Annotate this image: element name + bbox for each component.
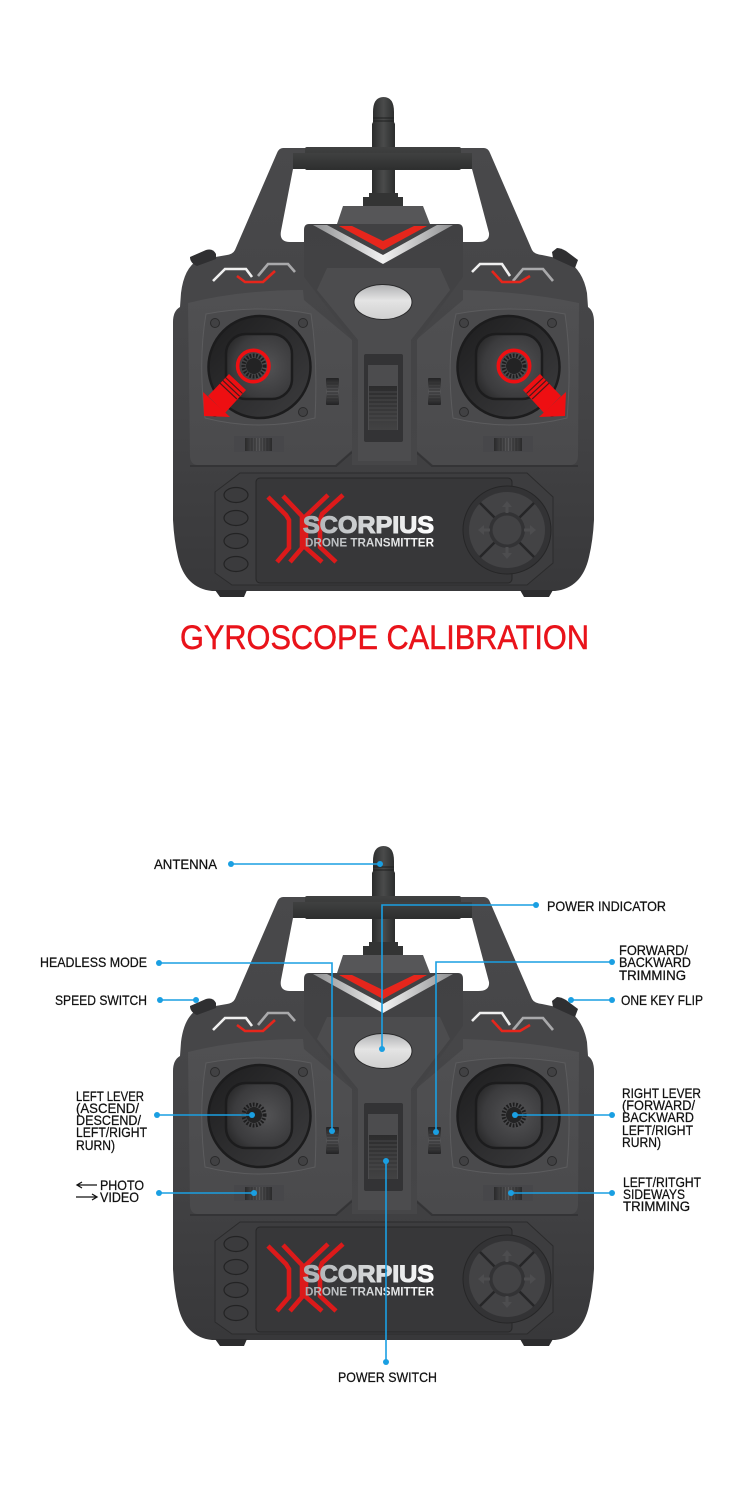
logo text: DRONE TRANSMITTER — [305, 536, 434, 550]
logo text: SCORPIUS — [303, 1261, 434, 1288]
handle bar — [293, 896, 472, 919]
callout: right lever: RURN) — [622, 1134, 661, 1150]
title: GYROSCOPE CALIBRATION — [180, 619, 589, 657]
power switch — [364, 354, 403, 442]
callout: sideways trimming: TRIMMING — [623, 1198, 690, 1214]
logo mark — [268, 1244, 343, 1311]
right red ring — [498, 350, 530, 382]
horizontal trims — [234, 436, 533, 452]
callout: sideways trimming — [508, 1174, 701, 1214]
chevron — [313, 974, 453, 1013]
callout: right lever — [512, 1085, 701, 1150]
callout: one key flip: ONE KEY FLIP — [621, 992, 703, 1008]
d-pad — [463, 486, 551, 574]
antenna — [363, 97, 403, 206]
right stick — [450, 1058, 569, 1174]
centre panel — [304, 206, 463, 465]
callout: photo and video: VIDEO — [100, 1189, 139, 1205]
callout: right lever: RIGHT LEVER — [622, 1085, 701, 1101]
logo mark — [268, 495, 343, 562]
callout: right lever: (FORWARD/ — [622, 1097, 695, 1113]
right wing emblem — [472, 264, 553, 282]
left red arrow — [203, 374, 246, 417]
right stick — [450, 309, 569, 425]
horizontal trims — [234, 1185, 533, 1201]
callout: power switch — [338, 1158, 437, 1385]
power indicator — [354, 284, 412, 320]
handle bar — [293, 147, 472, 170]
vertical trims — [326, 378, 441, 405]
transmitter: parts diagram — [173, 846, 594, 1346]
callout: power indicator — [379, 898, 666, 1052]
d-pad — [463, 1235, 551, 1323]
handle and body shell — [173, 148, 594, 597]
power indicator — [354, 1034, 412, 1068]
callout: left lever: LEFT LEVER — [76, 1088, 144, 1104]
callout: right lever: LEFT/RIGHT — [622, 1122, 693, 1138]
callout: headless mode: HEADLESS MODE — [40, 954, 147, 970]
right wing emblem — [472, 1013, 553, 1031]
shoulder knobs — [190, 997, 578, 1017]
right red arrow — [523, 374, 566, 417]
transmitter: gyroscope calibration — [173, 97, 594, 597]
callout: forward backward trimming: BACKWARD — [619, 954, 691, 970]
callout: left lever: LEFT/RIGHT — [76, 1124, 147, 1140]
left wing emblem — [213, 1013, 295, 1031]
handle and body shell — [173, 897, 594, 1346]
callout: left lever: RURN) — [76, 1137, 115, 1153]
left stick — [202, 1058, 316, 1174]
callout: forward backward trimming — [433, 942, 691, 1135]
vertical trims — [326, 1127, 441, 1154]
callout: right lever: BACKWARD — [622, 1109, 694, 1125]
callout: forward backward trimming: TRIMMING — [619, 967, 686, 983]
antenna — [363, 846, 403, 955]
logo text: SCORPIUS — [303, 512, 434, 539]
left wing emblem — [213, 264, 295, 282]
callout: forward backward trimming: FORWARD/ — [619, 942, 688, 958]
lower panel — [215, 1222, 553, 1334]
callout: speed switch: SPEED SWITCH — [55, 992, 147, 1008]
left red ring — [238, 350, 269, 382]
callout: power switch: POWER SWITCH — [338, 1369, 437, 1385]
callout: antenna — [154, 856, 383, 872]
callout: antenna: ANTENNA — [154, 856, 218, 872]
power switch — [364, 1103, 403, 1191]
callout: power indicator: POWER INDICATOR — [547, 898, 666, 914]
callout: left lever: (ASCEND/ — [76, 1100, 139, 1116]
callout: sideways trimming: SIDEWAYS — [623, 1186, 685, 1202]
lower panel — [215, 473, 553, 585]
callout: photo and video — [76, 1177, 257, 1205]
shoulder knobs — [190, 248, 578, 268]
callout: one key flip — [568, 992, 703, 1008]
callout: left lever: DESCEND/ — [76, 1112, 141, 1128]
logo text: DRONE TRANSMITTER — [305, 1284, 434, 1298]
callout: sideways trimming: LEFT/RITGHT — [623, 1174, 701, 1190]
side panels — [188, 290, 579, 466]
left stick — [202, 309, 316, 425]
callout: photo and video: PHOTO — [100, 1177, 144, 1193]
callout: left lever — [76, 1088, 255, 1153]
side panels — [188, 1039, 579, 1215]
callout: headless mode — [40, 954, 335, 1134]
centre panel — [304, 955, 463, 1214]
chevron — [313, 225, 453, 264]
